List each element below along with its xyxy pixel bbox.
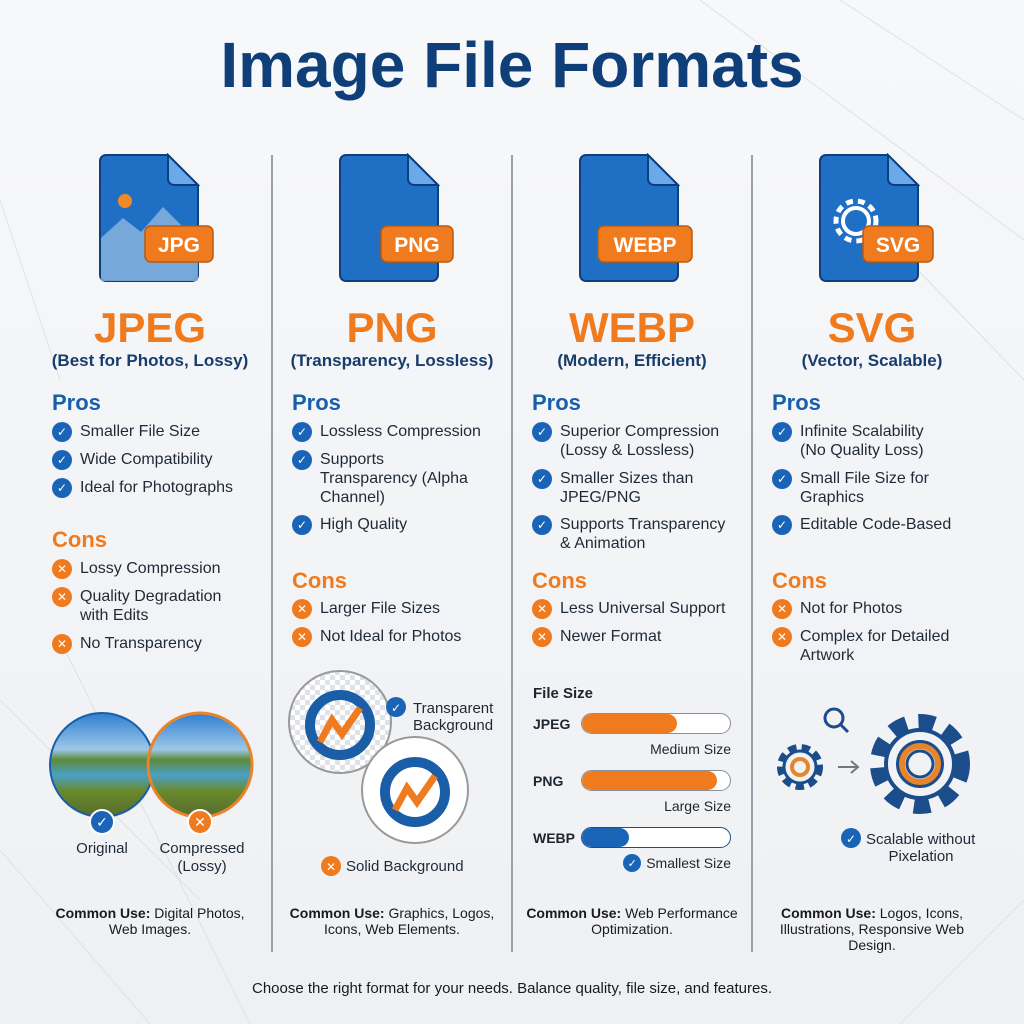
panel: PNG pros and cons: High Quality (320, 516, 407, 533)
panel: WEBP pros and cons: Pros (532, 390, 581, 415)
panel: WEBP pros and cons: Less Universal Support (560, 600, 725, 617)
panel: JPEG pros and cons: Pros (52, 390, 101, 415)
panel: SVG pros and cons: ✕ (777, 630, 787, 644)
subtitle: WEBP: (Modern, Efficient) (557, 351, 707, 370)
panel: WEBP pros and cons: Cons (532, 568, 587, 593)
panel: WEBP pros and cons: ✓ (537, 472, 547, 486)
panel: WEBP pros and cons: ✕ (537, 630, 547, 644)
title: Image File Formats (220, 29, 804, 101)
panel: PNG pros and cons: Pros (292, 390, 341, 415)
panel: PNG pros and cons: ✕ (297, 630, 307, 644)
panel: JPEG pros and cons: ✕ (57, 637, 67, 651)
subtitle: PNG: (Transparency, Lossless) (291, 351, 493, 370)
panel: JPEG pros and cons: ✕ (57, 562, 67, 576)
common use: SVG (780, 905, 964, 953)
panel: PNG pros and cons: Channel) (320, 489, 385, 506)
icon: JPG file: JPG (158, 234, 200, 257)
panel: WEBP pros and cons: ✓ (537, 518, 547, 532)
panel: PNG pros and cons: Larger File Sizes (320, 600, 440, 617)
panel: JPEG pros and cons: ✓ (57, 453, 67, 467)
panel: SVG pros and cons: ✓ (777, 425, 787, 439)
illustration: SVG scaling gears (777, 708, 976, 865)
panel: WEBP pros and cons: & Animation (560, 535, 645, 552)
illustration: JPEG original vs compressed: Compressed (159, 840, 245, 857)
panel: JPEG pros and cons: Smaller File Size (80, 423, 200, 440)
common use: SVG: Illustrations, Responsive Web (780, 921, 964, 937)
panel: PNG pros and cons: ✓ (297, 518, 307, 532)
panel: PNG pros and cons (292, 390, 481, 647)
panel: WEBP pros and cons: Smaller Sizes than (560, 470, 693, 487)
panel: WEBP pros and cons: JPEG/PNG (560, 489, 641, 506)
heading: SVG: SVG (828, 304, 916, 351)
illustration: PNG transparent vs solid background: ✕ (326, 860, 336, 874)
subtitle: SVG: (Vector, Scalable) (802, 351, 942, 370)
common use: PNG (290, 905, 494, 937)
common use: JPEG (55, 905, 245, 937)
chart: file size bars: File Size (533, 685, 593, 702)
panel: JPEG pros and cons: ✓ (57, 425, 67, 439)
icon: WEBP file: WEBP (614, 234, 676, 257)
panel: WEBP pros and cons (532, 390, 726, 647)
panel: WEBP pros and cons: ✓ (537, 425, 547, 439)
panel: SVG pros and cons: ✓ (777, 518, 787, 532)
panel: SVG pros and cons: Infinite Scalability (800, 423, 924, 440)
common use: PNG: Common Use: Graphics, Logos, (290, 905, 494, 921)
panel: JPEG pros and cons: ✓ (57, 481, 67, 495)
illustration: PNG transparent vs solid background: ✓ (391, 701, 401, 715)
panel: JPEG pros and cons: Quality Degradation (80, 588, 221, 605)
panel: WEBP pros and cons: Supports Transparency (560, 516, 725, 533)
panel: SVG pros and cons: Pros (772, 390, 821, 415)
panel: JPEG pros and cons: Cons (52, 527, 107, 552)
heading: JPEG: JPEG (94, 304, 206, 351)
panel: SVG pros and cons: ✕ (777, 602, 787, 616)
footer: Choose the right format for your needs. Balance quality, file size, and features. (252, 980, 772, 997)
common use: PNG: Icons, Web Elements. (324, 921, 460, 937)
chart: file size bars (533, 685, 731, 872)
heading: PNG: PNG (346, 304, 438, 351)
chart: file size bars: Large Size (664, 798, 731, 814)
common use: WEBP: Common Use: Web Performance (526, 905, 738, 921)
common use: JPEG: Web Images. (109, 921, 191, 937)
panel: SVG pros and cons: Graphics (800, 489, 864, 506)
panel: PNG pros and cons: Transparency (Alpha (320, 470, 468, 487)
illustration: PNG transparent vs solid background: Transparent (413, 700, 494, 717)
chart: file size bars: Medium Size (650, 741, 731, 757)
panel: PNG pros and cons: ✕ (297, 602, 307, 616)
illustration: JPEG original vs compressed: ✕ (194, 815, 206, 831)
common use: SVG: Common Use: Logos, Icons, (781, 905, 963, 921)
chart: file size bars: ✓ (628, 858, 637, 870)
illustration: JPEG original vs compressed (49, 712, 254, 875)
panel: JPEG pros and cons: with Edits (80, 607, 148, 624)
panel: JPEG pros and cons (52, 390, 233, 654)
common use: WEBP: Optimization. (591, 921, 673, 937)
panel: WEBP pros and cons: ✕ (537, 602, 547, 616)
illustration: PNG transparent vs solid background: Solid Background (346, 858, 464, 875)
common use: JPEG: Common Use: Digital Photos, (55, 905, 245, 921)
panel: SVG pros and cons (772, 390, 951, 664)
icon: SVG file: SVG (876, 234, 920, 257)
chart: file size bars: WEBP (533, 830, 575, 846)
illustration: JPEG original vs compressed: Original (76, 840, 128, 857)
panel: SVG pros and cons: ✓ (777, 472, 787, 486)
illustration: SVG scaling gears: ✓ (846, 832, 856, 846)
panel: PNG pros and cons: ✓ (297, 425, 307, 439)
illustration: SVG scaling gears: Scalable without (866, 831, 976, 848)
icon: JPG file (99, 153, 214, 282)
panel: PNG pros and cons: ✓ (297, 453, 307, 467)
illustration: JPEG original vs compressed: ✓ (96, 815, 108, 831)
common use: WEBP (526, 905, 738, 937)
panel: WEBP pros and cons: Superior Compression (560, 423, 719, 440)
panel: SVG pros and cons: Editable Code-Based (800, 516, 951, 533)
panel: JPEG pros and cons: ✕ (57, 590, 67, 604)
common use: SVG: Design. (848, 937, 896, 953)
illustration: PNG transparent vs solid background (288, 670, 494, 876)
subtitle: JPEG: (Best for Photos, Lossy) (52, 351, 248, 370)
panel: PNG pros and cons: Cons (292, 568, 347, 593)
panel: WEBP pros and cons: (Lossy & Lossless) (560, 442, 694, 459)
panel: PNG pros and cons: Not Ideal for Photos (320, 628, 461, 645)
icon: PNG file: PNG (394, 234, 440, 257)
panel: JPEG pros and cons: Lossy Compression (80, 560, 220, 577)
panel: WEBP pros and cons: Newer Format (560, 628, 661, 645)
panel: SVG pros and cons: Artwork (800, 647, 854, 664)
illustration: PNG transparent vs solid background: Background (413, 717, 493, 734)
panel: SVG pros and cons: Cons (772, 568, 827, 593)
icon: SVG file (819, 153, 934, 282)
panel: SVG pros and cons: Complex for Detailed (800, 628, 949, 645)
illustration: JPEG original vs compressed: (Lossy) (177, 858, 227, 875)
panel: JPEG pros and cons: Ideal for Photographs (80, 479, 233, 496)
panel: SVG pros and cons: Not for Photos (800, 600, 902, 617)
illustration: SVG scaling gears: Pixelation (888, 848, 954, 865)
icon: WEBP file (579, 153, 693, 282)
heading: WEBP: WEBP (569, 304, 695, 351)
panel: JPEG pros and cons: Wide Compatibility (80, 451, 212, 468)
panel: SVG pros and cons: Small File Size for (800, 470, 929, 487)
chart: file size bars: Smallest Size (646, 855, 731, 871)
icon: PNG file (339, 153, 454, 282)
chart: file size bars: PNG (533, 773, 563, 789)
panel: PNG pros and cons: Lossless Compression (320, 423, 481, 440)
panel: PNG pros and cons: Supports (320, 451, 384, 468)
panel: JPEG pros and cons: No Transparency (80, 635, 202, 652)
panel: SVG pros and cons: (No Quality Loss) (800, 442, 924, 459)
chart: file size bars: JPEG (533, 716, 570, 732)
